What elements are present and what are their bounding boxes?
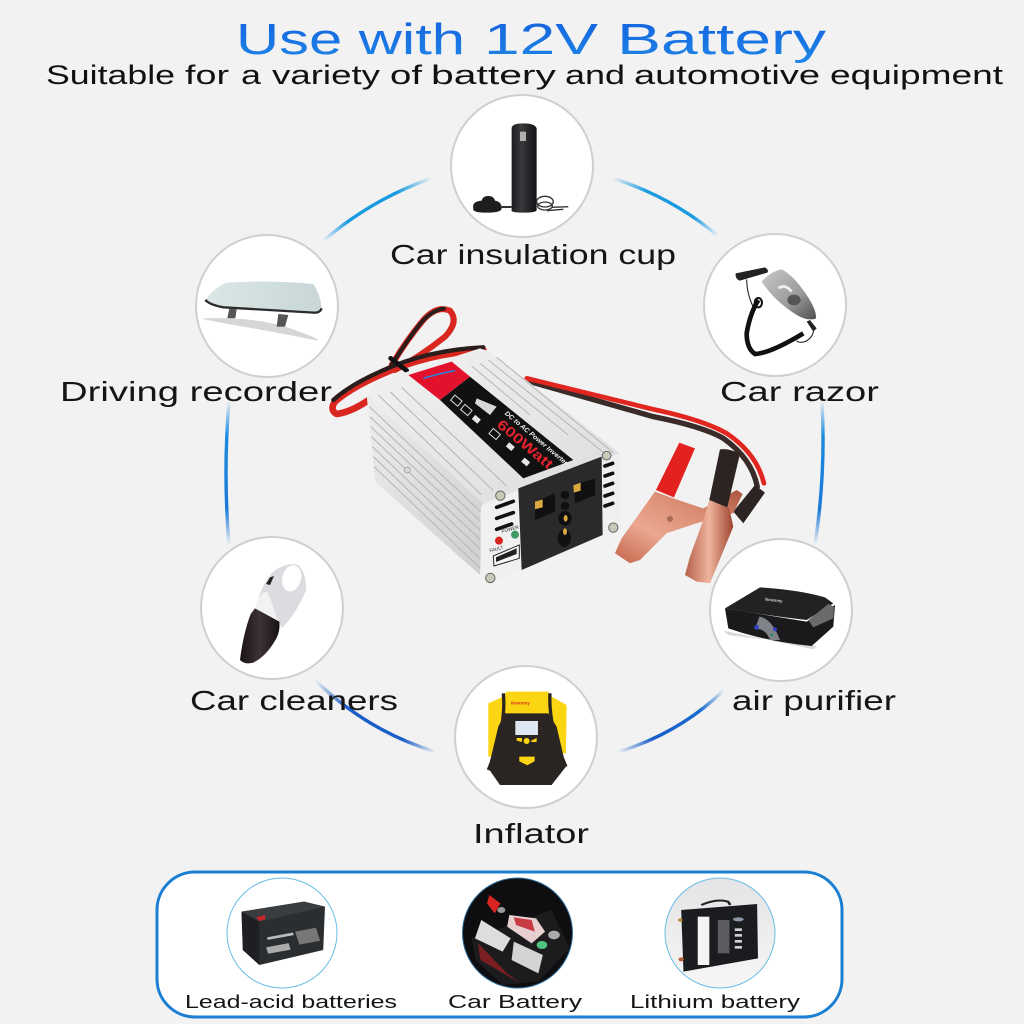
lithium battery icon — [665, 878, 775, 988]
central product: power inverter: DC to AC Power Inverter — [503, 410, 569, 467]
item: inflator: Newsmy — [511, 700, 530, 705]
vents — [497, 463, 613, 529]
label: lead-acid batteries: Lead-acid batteries — [185, 992, 397, 1012]
housing top — [367, 348, 620, 503]
front face — [481, 454, 622, 583]
subtitle: automotive — [634, 60, 820, 90]
central product: power inverter: POWER — [501, 524, 520, 534]
central product: power inverter: FAULT — [489, 545, 504, 553]
item: inflator — [455, 666, 597, 808]
label text: 600Watt — [494, 416, 557, 472]
item: air purifier: Newsmy — [765, 597, 783, 604]
screws — [486, 451, 618, 583]
subtitle: for — [185, 60, 229, 90]
alligator clips — [733, 485, 765, 523]
title: Battery — [617, 15, 826, 64]
title: 12V — [484, 15, 599, 64]
item: car razor — [704, 234, 846, 376]
subtitle: equipment — [830, 60, 1004, 90]
subtitle: battery — [431, 60, 557, 90]
panel: battery types — [157, 872, 842, 1017]
arcs connecting the device ring — [226, 178, 823, 752]
item: car insulation cup — [451, 95, 593, 237]
item: driving recorder mirror — [196, 235, 338, 377]
label: car cleaners: Car cleaners — [190, 685, 398, 716]
subtitle: variety — [272, 60, 381, 90]
item: car cleaner vacuum — [201, 537, 343, 679]
subtitle: Suitable — [46, 60, 175, 90]
label: car insulation cup: Car insulation cup — [390, 239, 676, 270]
subtitle: a — [241, 60, 262, 90]
LEDs and USB — [495, 537, 503, 545]
title — [236, 15, 826, 64]
item: air purifier — [710, 539, 852, 681]
subtitle — [46, 60, 1004, 90]
label: car razor: Car razor — [720, 376, 879, 407]
label: lithium battery: Lithium battery — [630, 992, 800, 1012]
black label panel — [440, 377, 573, 478]
label: car battery: Car Battery — [448, 992, 582, 1012]
label: air purifier: air purifier — [732, 685, 896, 716]
cable loop — [333, 309, 483, 414]
red label — [408, 362, 470, 400]
subtitle: of — [390, 60, 423, 90]
cable to clips — [527, 378, 764, 487]
socket panel — [518, 457, 603, 570]
title: Use with — [236, 15, 465, 64]
label: driving recorder: Driving recorder — [60, 376, 332, 407]
label: inflator: Inflator — [473, 818, 589, 849]
housing left side — [367, 395, 483, 575]
subtitle: and — [565, 60, 625, 90]
car battery icon — [462, 878, 572, 988]
central product: power inverter — [333, 309, 765, 583]
lead-acid battery icon — [227, 878, 337, 988]
